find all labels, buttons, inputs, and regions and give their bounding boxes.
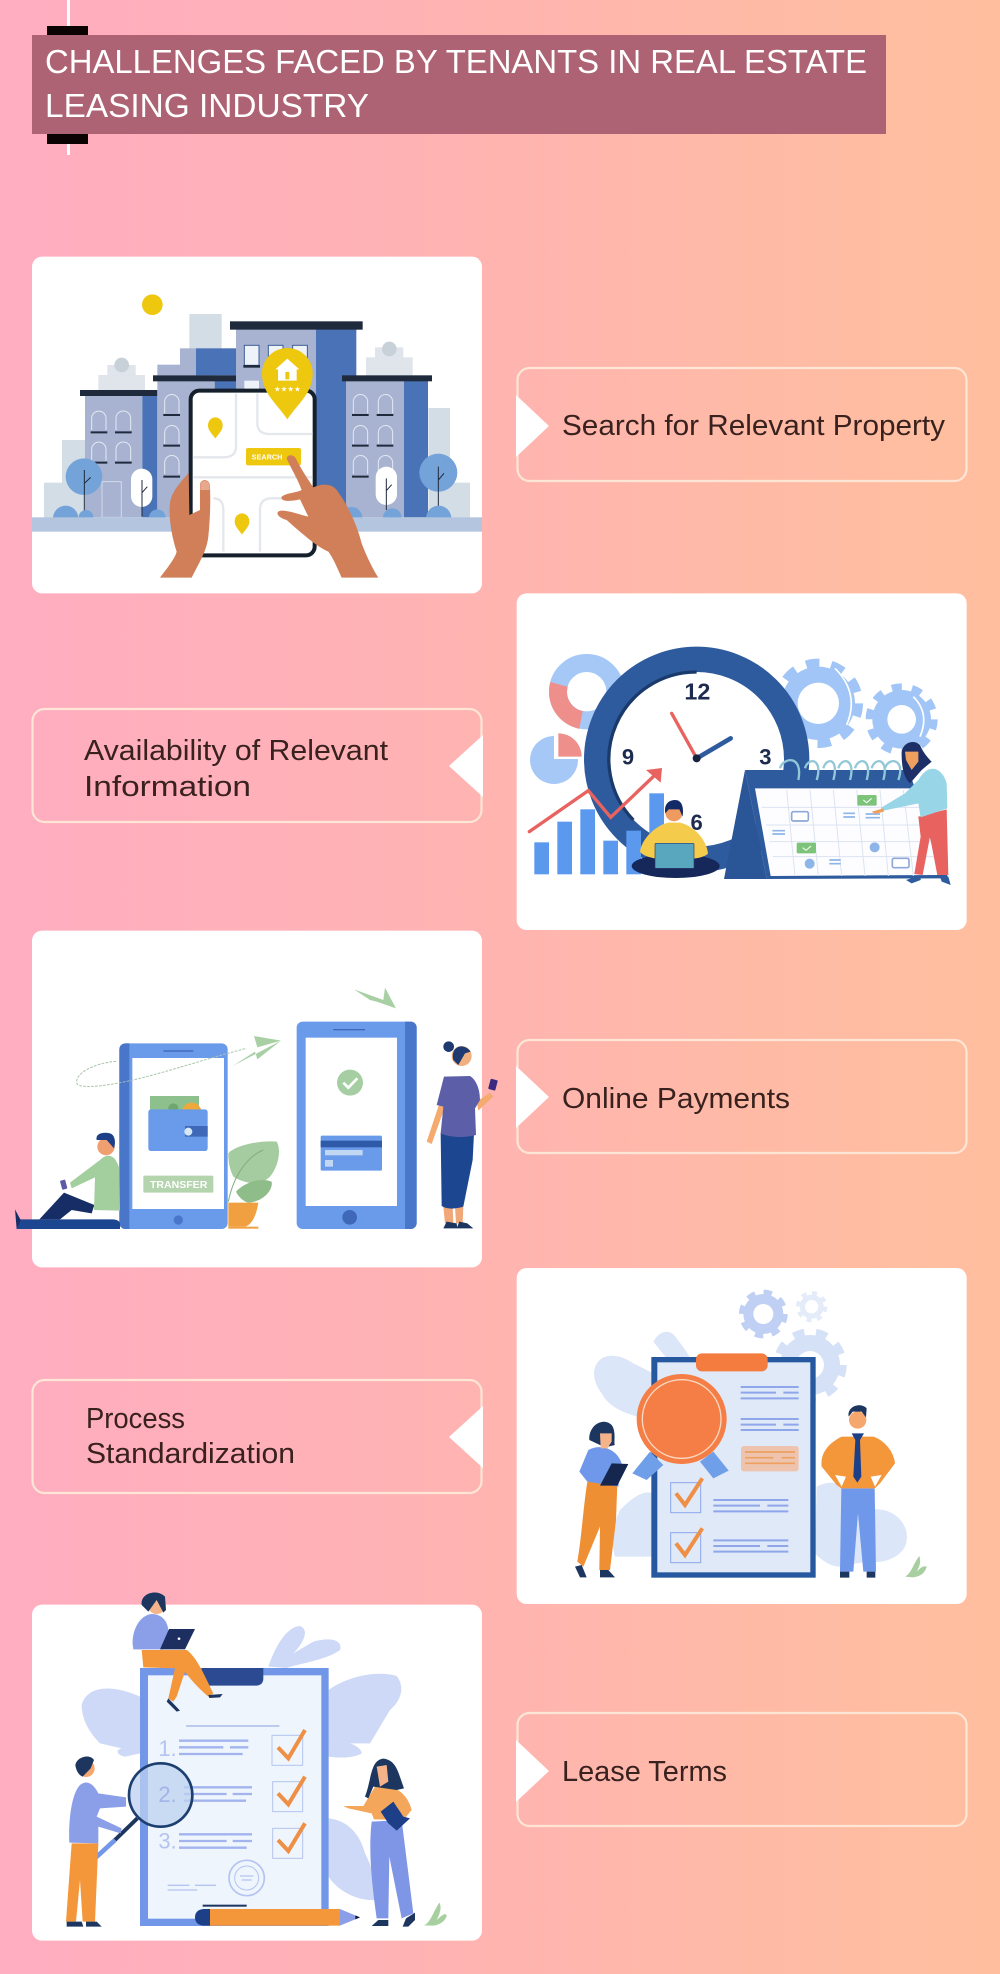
panel: clock and calendar illustration card (517, 593, 967, 930)
ground (32, 517, 482, 532)
arrow (449, 735, 483, 797)
calendar (724, 760, 948, 879)
title text: CHALLENGES FACED BY TENANTS IN REAL ESTATE (45, 43, 867, 80)
panel: certification illustration card (517, 1268, 967, 1604)
arrow (516, 1066, 549, 1128)
building 1 (80, 390, 157, 517)
search button (246, 448, 301, 465)
plant (905, 1556, 927, 1577)
arrow (449, 1406, 483, 1468)
hands (160, 455, 378, 578)
arrow (516, 1740, 549, 1802)
phone: transfer (119, 1043, 228, 1229)
label: process standardization: Process (86, 1403, 185, 1435)
title text: LEASING INDUSTRY (45, 87, 369, 124)
standing woman (427, 1041, 498, 1228)
bar chart (534, 793, 664, 874)
clock (597, 659, 797, 859)
pie chart (530, 732, 584, 784)
label: availability of relevant information: Availability of Relevant (84, 735, 388, 767)
dashed flight path (77, 1048, 247, 1086)
woman with tablet (575, 1422, 628, 1577)
label: lease terms (516, 1713, 966, 1826)
potted plant (228, 1141, 279, 1229)
clipboard (651, 1353, 816, 1578)
icon: wallet (148, 1096, 208, 1151)
donut chart (558, 663, 615, 720)
man with magnifying glass (66, 1756, 126, 1927)
building 3 (230, 321, 363, 518)
clipboard checklist: 3. (158, 1829, 177, 1854)
clipboard checklist (140, 1668, 329, 1926)
clipboard checklist: 1. (158, 1736, 177, 1761)
building 4 (342, 375, 432, 517)
title banner (32, 0, 886, 155)
magnifying glass: 2. (158, 1782, 177, 1807)
label: lease terms: Lease Terms (562, 1756, 727, 1788)
label: online payments: Online Payments (562, 1083, 790, 1115)
background leaves (82, 1626, 401, 1900)
background skyline (44, 314, 470, 518)
icon: location pin with house (262, 348, 313, 419)
woman at calendar (872, 742, 951, 885)
search button: SEARCH (252, 452, 282, 461)
label: process standardization: Standardization (86, 1438, 295, 1470)
gears (778, 663, 934, 751)
icon: sun (142, 294, 163, 315)
gears (742, 1293, 843, 1398)
clock: 9 (622, 744, 634, 769)
panel: lease checklist illustration card (32, 1593, 482, 1941)
clipboard checklist: 2. (158, 1782, 177, 1807)
label: availability of relevant information (32, 709, 483, 822)
background leaves (594, 1332, 907, 1567)
icon: medal (632, 1374, 729, 1480)
clock: 6 (691, 810, 703, 835)
pencil (195, 1905, 360, 1926)
seated man (15, 1133, 120, 1229)
label: process standardization (32, 1380, 483, 1493)
woman on top with laptop (133, 1593, 223, 1712)
label: search for relevant property (516, 368, 966, 481)
man with tie (821, 1405, 895, 1578)
person with laptop (632, 800, 720, 878)
woman presenting (343, 1759, 415, 1927)
transfer button (143, 1176, 213, 1193)
label: search for relevant property: Search for Relevant Property (562, 410, 945, 442)
arrow: rising trend (529, 768, 662, 832)
transfer button: TRANSFER (150, 1180, 208, 1191)
building 2 (153, 348, 236, 517)
panel: online payments illustration card (15, 931, 498, 1267)
label: online payments (516, 1040, 966, 1153)
phone: confirmed card (297, 1022, 417, 1229)
icon: paper planes (233, 988, 396, 1066)
label: availability of relevant information: Information (84, 771, 251, 803)
tablet with map (191, 391, 315, 555)
trees (53, 454, 457, 531)
plant (424, 1903, 447, 1926)
arrow (516, 395, 549, 457)
clock: 3 (759, 744, 771, 769)
clock: 12 (684, 678, 710, 704)
icon: location pin with house: ★★★★ (274, 384, 301, 393)
panel: search illustration card (32, 257, 482, 593)
magnifying glass (95, 1763, 192, 1858)
